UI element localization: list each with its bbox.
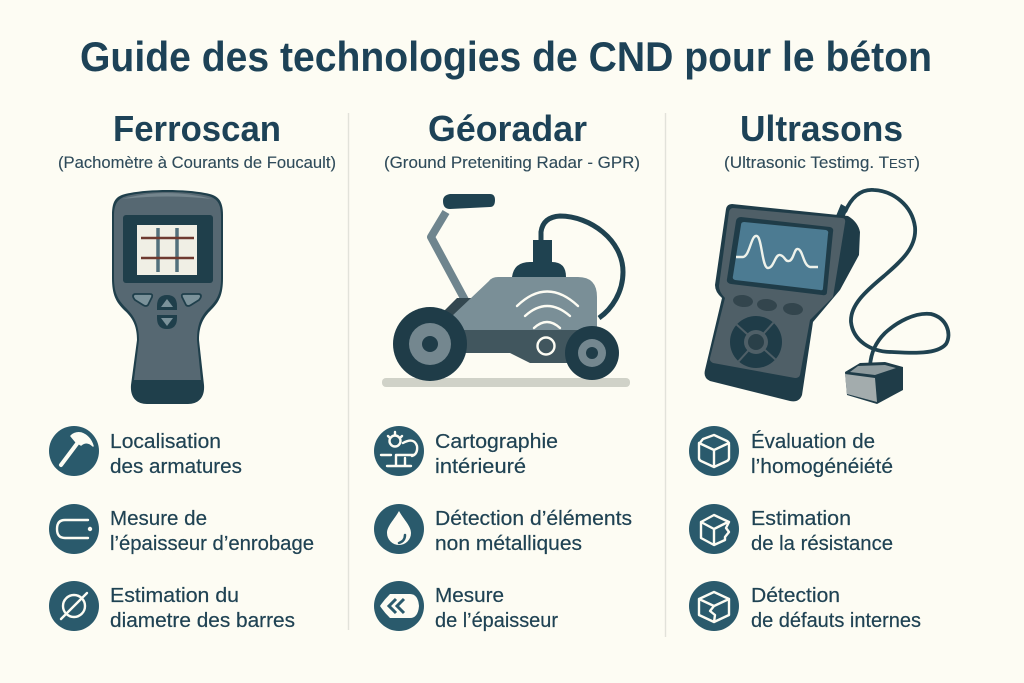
item: Évaluation de l'homogénéiété: Évaluation de [751, 430, 875, 453]
item: Estimation du diametre des barres: diametre des barres [110, 609, 295, 632]
item: Mesure de l'épaisseur d'enrobage [49, 504, 314, 555]
item: Localisation des armatures: des armatures [110, 455, 242, 478]
item: Mesure de l'épaisseur: de l’épaisseur [435, 609, 558, 632]
heading: Géoradar: Géoradar [428, 108, 587, 149]
item: Estimation de la résistance: Estimation [751, 507, 851, 530]
item: Évaluation de l'homogénéiété [689, 426, 893, 478]
item: Détection de défauts internes [689, 581, 921, 632]
item: Cartographie intérieure: Cartographie [435, 430, 558, 453]
title: Guide des technologies de CND pour le béton [80, 33, 932, 80]
item: Détection de défauts internes: Détection [751, 584, 840, 607]
item: Estimation de la résistance [689, 504, 893, 555]
panel: Ferroscan [49, 108, 336, 632]
item: Évaluation de l'homogénéiété: l’homogénéiété [751, 455, 893, 478]
panel: Géoradar [374, 108, 640, 632]
item: Localisation des armatures [49, 426, 242, 478]
item: Détection d'éléments non métalliques: non métalliques [435, 532, 582, 555]
item: Estimation du diametre des barres [49, 581, 295, 632]
panel: Ultrasons [689, 108, 948, 632]
item: Estimation de la résistance: de la résistance [751, 532, 893, 555]
item: Estimation du diametre des barres: Estimation du [110, 584, 239, 607]
heading: Ultrasons: Ultrasons [740, 108, 903, 149]
subtitle: Ferroscan: (Pachomètre à Courants de Foucault) [58, 154, 336, 172]
icon: Ferroscan device [112, 190, 223, 404]
heading: Ferroscan: Ferroscan [113, 108, 281, 149]
subtitle: Géoradar: (Ground Preteniting Radar - GPR) [384, 154, 640, 172]
icon: Géoradar cart [382, 194, 630, 387]
item: Mesure de l'épaisseur d'enrobage: Mesure de [110, 507, 207, 530]
item: Cartographie intérieure [374, 426, 558, 478]
item: Mesure de l'épaisseur d'enrobage: l’épaisseur d’enrobage [110, 532, 314, 555]
item: Cartographie intérieure: intérieuré [435, 455, 526, 478]
item: Détection d'éléments non métalliques [374, 504, 632, 555]
item: Localisation des armatures: Localisation [110, 430, 221, 453]
icon: Ultrasons device [705, 190, 948, 404]
item: Détection de défauts internes: de défauts internes [751, 609, 921, 632]
subtitle: Ultrasons: (Ultrasonic Testimg. T EST) [724, 154, 920, 172]
item: Mesure de l'épaisseur [374, 581, 558, 632]
item: Détection d'éléments non métalliques: Détection d’éléments [435, 507, 632, 530]
item: Mesure de l'épaisseur: Mesure [435, 584, 504, 607]
